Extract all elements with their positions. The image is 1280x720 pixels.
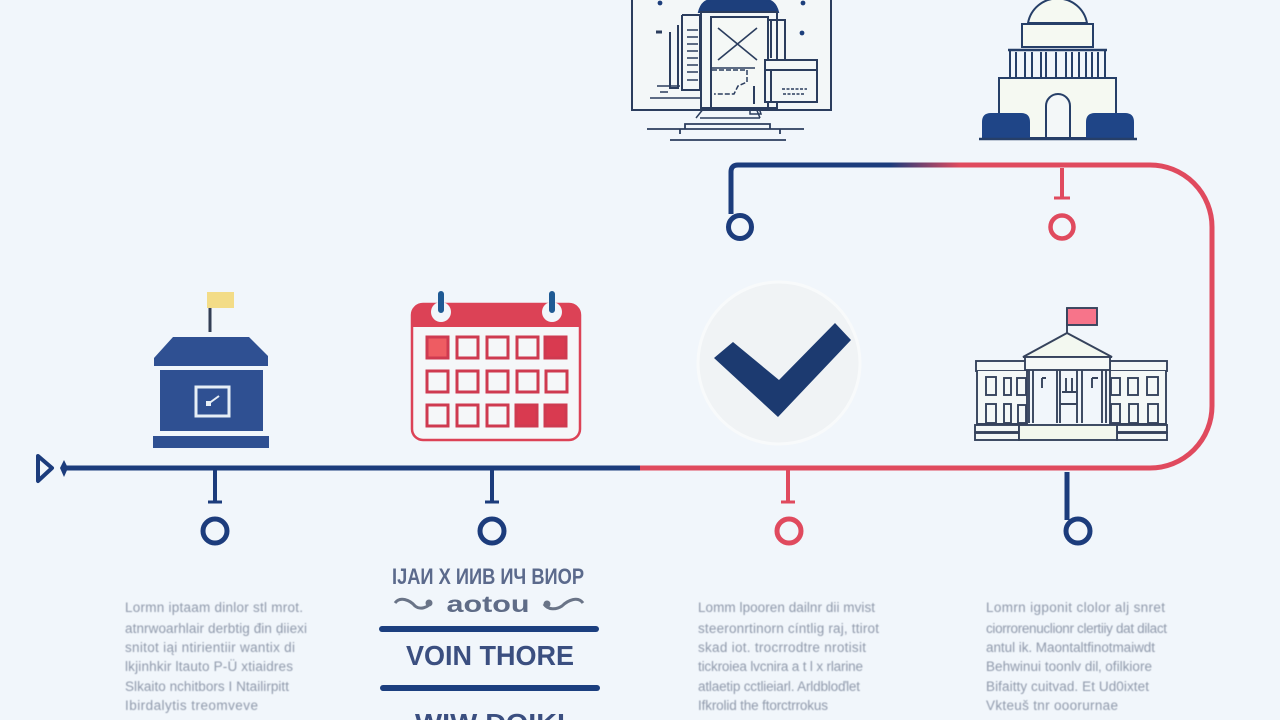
timeline upper branch bbox=[66, 165, 1212, 468]
text block: step 3: steeronrtinorn cíntlig raj, ttirot bbox=[698, 621, 879, 636]
text block: step 4: Behwinui toonlv dil‚ ofilkiore bbox=[986, 659, 1152, 674]
text block: step 4: Bifaitty cuitvad. Et Ud0ixtet bbox=[986, 679, 1149, 694]
text block: step 3: Lomm lpooren dailnr dii mvist bbox=[698, 600, 875, 615]
banner main label: VOIN THORE bbox=[406, 640, 574, 671]
icon: ballot box with flag bbox=[153, 292, 269, 448]
banner rule bottom bbox=[380, 685, 600, 691]
banner subtitle with flourishes bbox=[395, 591, 583, 617]
text block: step 3: skad iot. trocrrodtre nrotisit bbox=[698, 640, 866, 655]
banner title line: IJAИ X ИИВ ИЧ ВИОР bbox=[392, 564, 584, 589]
marker: step 5 top left bbox=[728, 216, 752, 238]
marker: step 3 bbox=[777, 470, 801, 543]
text block: step 4: ciorrorenuclionr clertiiy dat dilact bbox=[986, 621, 1167, 636]
text block: step 3: Ifkrolid the ftorctrrokus bbox=[698, 698, 828, 713]
text block: step 1: Ibirdalytis treomveve bbox=[125, 698, 258, 713]
text block: step 1: Slkaito nchitbors I Ntailirpitt bbox=[125, 679, 289, 694]
banner rule top bbox=[379, 626, 599, 632]
text block: step 4: Lomrn igponit clolor alj snret bbox=[986, 600, 1165, 615]
icon: capitol dome bbox=[979, 0, 1137, 139]
text block: step 1: snitot iąi ntirientiir wantix di bbox=[125, 640, 295, 655]
marker: step 6 top right bbox=[1050, 168, 1074, 238]
icon: white house with red flag bbox=[975, 308, 1167, 440]
text block: step 3: atlaetip cctlieiarl. Arldbloďlet bbox=[698, 679, 860, 694]
text block: step 1: atnrwoarhlair derbtig đin ḍiiexi bbox=[125, 621, 307, 636]
text block: step 1: Lormn iptaam dinlor stl mrot. bbox=[125, 600, 303, 615]
icon: check mark in circle bbox=[698, 282, 860, 444]
marker: step 2 bbox=[480, 470, 504, 543]
text block: step 3: tickroiea lvcnira a t l x rlarine bbox=[698, 659, 863, 674]
timeline start arrow bbox=[38, 456, 68, 481]
marker: step 4 bbox=[1066, 472, 1090, 543]
text block: step 4: Vkteuš tnr ooorurnae bbox=[986, 698, 1118, 713]
text block: step 4: antul ik. Maontaltfinotmaiwdt bbox=[986, 640, 1155, 655]
marker: step 1 bbox=[203, 470, 227, 543]
icon: government building in frame bbox=[632, 0, 831, 140]
text block: step 1: lkjinhkir ltauto P‑Ü xtiaidres bbox=[125, 659, 293, 674]
center banner: voting heading bbox=[379, 564, 600, 720]
banner subtitle with flourishes: aotou bbox=[446, 591, 530, 617]
icon: calendar bbox=[412, 294, 580, 440]
